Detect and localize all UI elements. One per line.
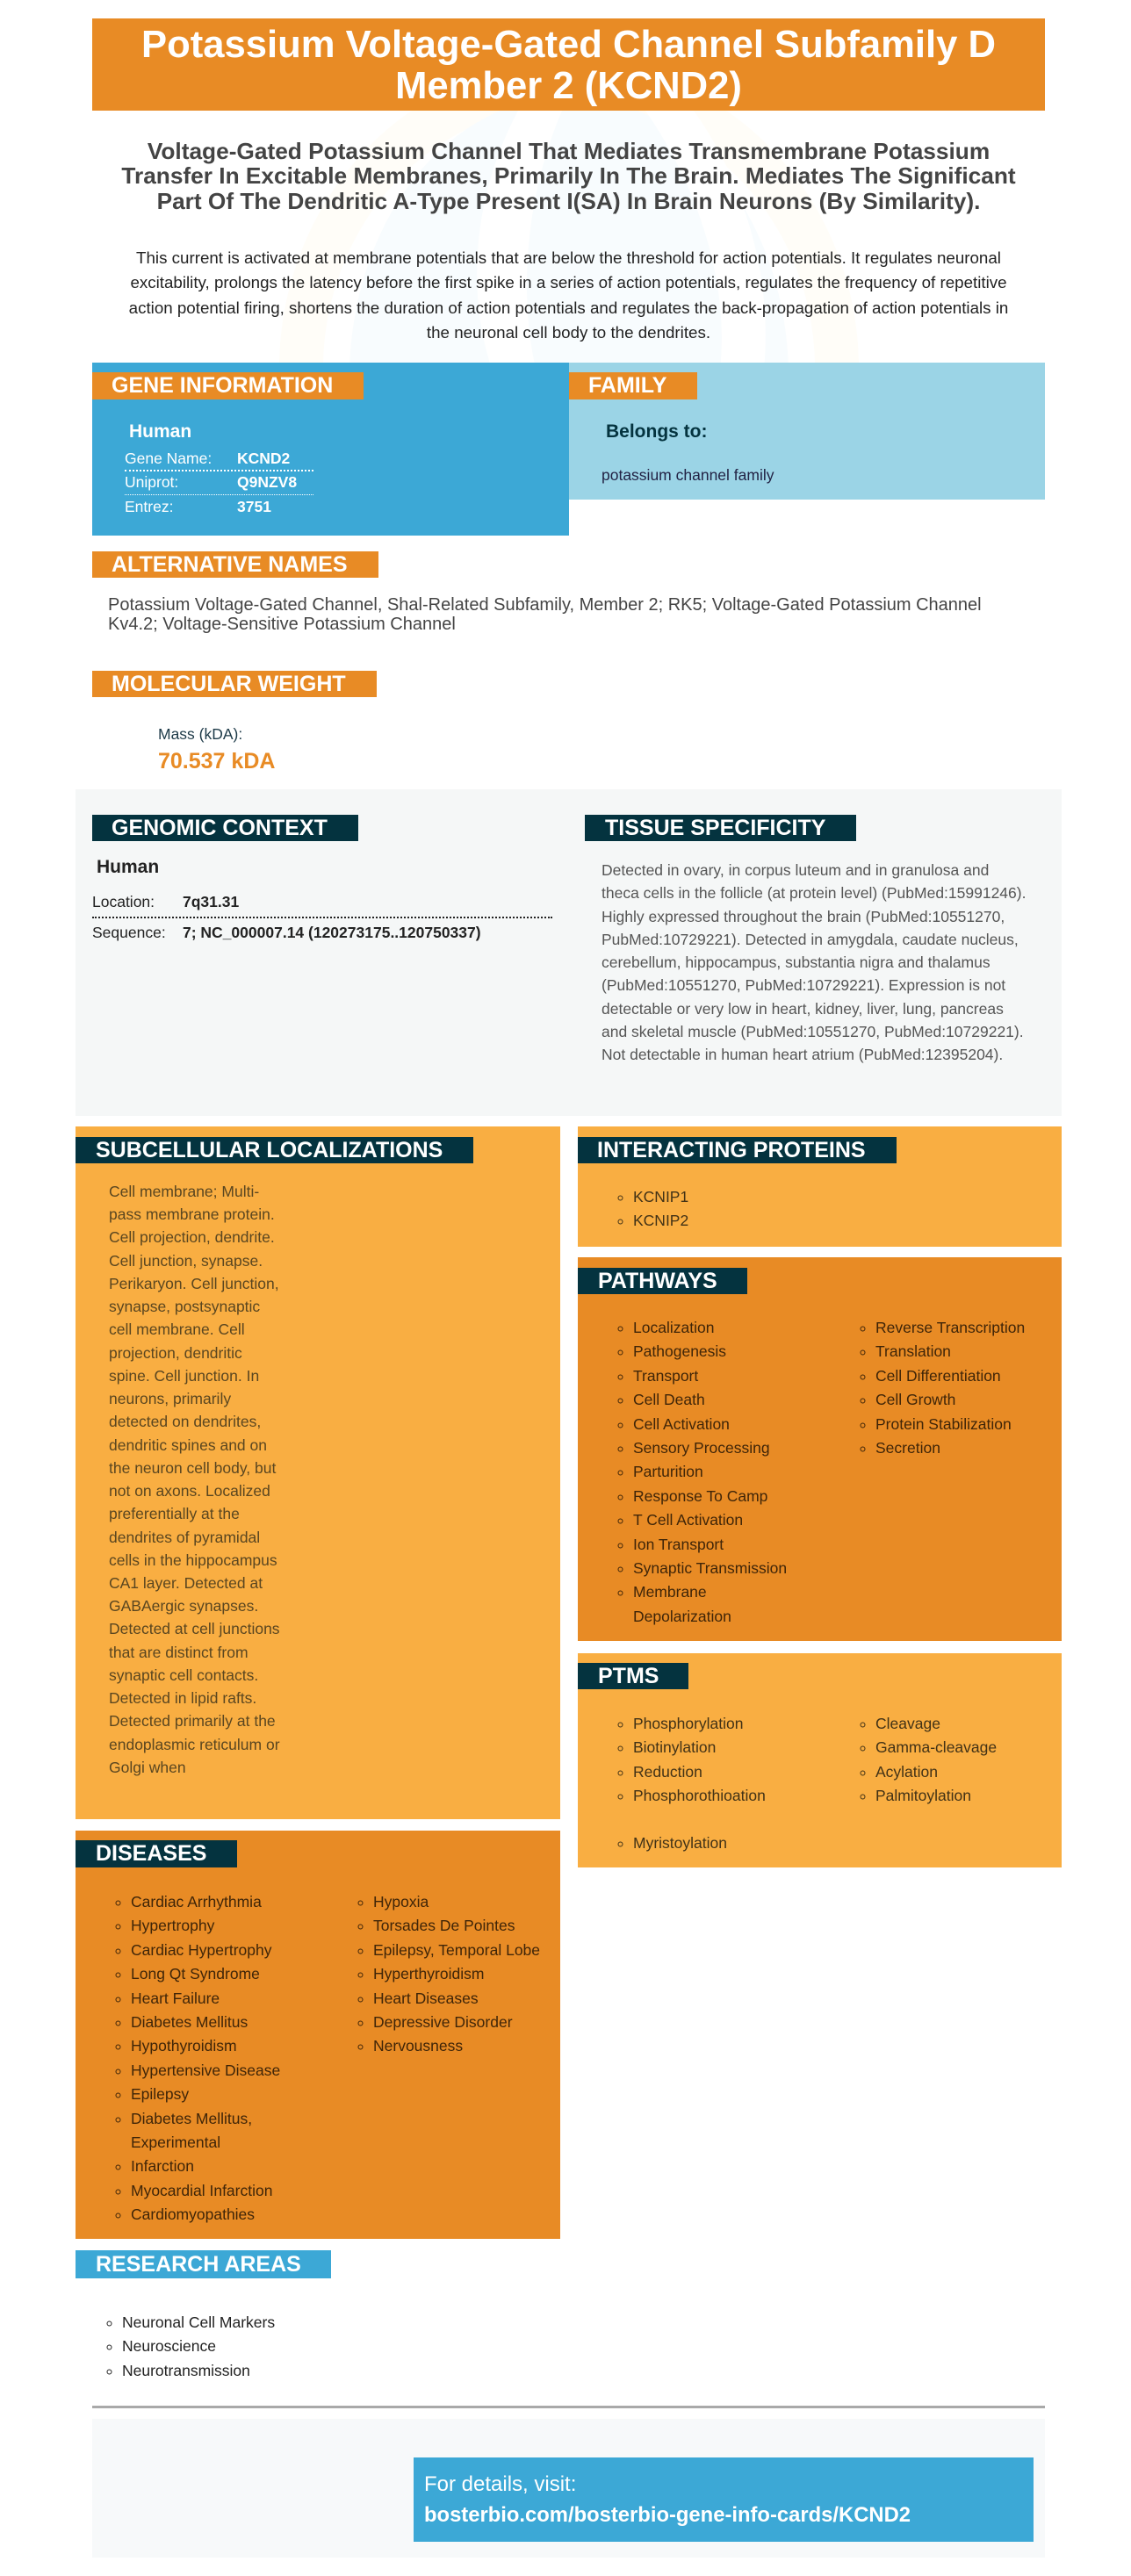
tissue specificity text: theca cells in the follicle (at protein level) (PubMed:15991246). — [602, 884, 1026, 902]
details label: For details, visit: — [424, 2472, 576, 2496]
pathways list column 1 — [618, 1319, 787, 1625]
gene details table: 3751 — [237, 498, 271, 515]
heading: family — [569, 372, 697, 399]
localization text — [109, 1183, 280, 1776]
PTM list column 1: Reduction — [633, 1763, 702, 1781]
localization text: Golgi when — [109, 1759, 186, 1776]
genomic location table: 7q31.31 — [183, 893, 239, 910]
heading: molecular weight: MOLECULAR WEIGHT — [112, 672, 346, 696]
background watermark logo — [0, 0, 1131, 369]
title banner: Member 2 (KCND2) — [395, 65, 742, 107]
pathways list column 1: Response To Camp — [633, 1487, 767, 1505]
pathways list column 1: Parturition — [633, 1463, 703, 1480]
localization text: the neuron cell body, but — [109, 1459, 276, 1477]
diseases list column 1 — [116, 1893, 280, 2223]
species label: Human — [97, 857, 159, 877]
gene details table: Q9NZV8 — [237, 473, 297, 491]
gene details table — [125, 450, 313, 515]
localization text: Perikaryon. Cell junction, — [109, 1275, 279, 1292]
heading: pathways — [578, 1268, 747, 1294]
heading: alternative names: ALTERNATIVE NAMES — [112, 552, 348, 577]
research areas list: Neurotransmission — [122, 2362, 250, 2379]
tissue specificity text: Detected in ovary, in corpus luteum and in granulosa and — [602, 861, 989, 879]
PTM list column 2: Gamma-cleavage — [875, 1738, 997, 1756]
PTM list column 1 — [618, 1715, 766, 1852]
belongs to label: Belongs to: — [606, 421, 708, 442]
pathways list column 2: Cell Differentiation — [875, 1367, 1001, 1385]
diseases list column 1: Hypertensive Disease — [131, 2062, 280, 2079]
localization text: spine. Cell junction. In — [109, 1367, 259, 1385]
diseases list column 1: Experimental — [131, 2133, 220, 2151]
diseases list column 2: Epilepsy, Temporal Lobe — [373, 1941, 540, 1959]
pathways list column 1: Synaptic Transmission — [633, 1559, 787, 1577]
title banner: Potassium Voltage-Gated Channel Subfamily D — [141, 24, 996, 66]
heading: gene information: GENE INFORMATION — [112, 373, 333, 398]
PTM list column 2: Cleavage — [875, 1715, 940, 1732]
PTM list column 1: Phosphorylation — [633, 1715, 743, 1732]
PTM list column 1: Phosphorothioation — [633, 1787, 766, 1804]
family name: potassium channel family — [602, 466, 774, 484]
heading: research areas: RESEARCH AREAS — [96, 2252, 301, 2277]
localization text: endoplasmic reticulum or — [109, 1736, 280, 1753]
panel: interacting proteins — [578, 1126, 1062, 1247]
localization text: cells in the hippocampus — [109, 1551, 277, 1569]
subtitle: Transfer In Excitable Membranes, Primarily In The Brain. Mediates The Significant — [121, 162, 1016, 189]
heading: diseases: DISEASES — [96, 1841, 206, 1866]
pathways list column 2: Secretion — [875, 1439, 940, 1457]
subtitle: Part Of The Dendritic A-Type Present I(SA) In Brain Neurons (By Similarity). — [157, 188, 980, 214]
pathways list column 1: Transport — [633, 1367, 698, 1385]
panel: subcellular localizations — [76, 1126, 560, 1819]
diseases list column 2: Torsades De Pointes — [373, 1917, 515, 1934]
panel: PTMs — [578, 1653, 1062, 1867]
localization text: that are distinct from — [109, 1644, 249, 1661]
heading: genomic context: GENOMIC CONTEXT — [112, 816, 328, 840]
pathways list column 1: Localization — [633, 1319, 714, 1336]
heading: family: FAMILY — [588, 373, 666, 398]
pathways list column 1: Cell Activation — [633, 1415, 730, 1433]
pathways list column 1: Sensory Processing — [633, 1439, 770, 1457]
diseases list column 1: Infarction — [131, 2157, 194, 2175]
footer panel — [92, 2419, 1045, 2558]
pathways list column 2: Cell Growth — [875, 1391, 955, 1408]
localization text: Detected primarily at the — [109, 1712, 276, 1730]
tissue specificity text: cerebellum, hippocampus, substantia nigra and thalamus — [602, 953, 991, 971]
localization text: CA1 layer. Detected at — [109, 1574, 263, 1592]
localization text: projection, dendritic — [109, 1344, 242, 1362]
localization text: neurons, primarily — [109, 1390, 231, 1407]
alternative names text: Kv4.2; Voltage-Sensitive Potassium Channel — [108, 615, 456, 634]
heading: subcellular localizations: SUBCELLULAR LOCALIZATIONS — [96, 1138, 443, 1162]
panel: pathways — [578, 1257, 1062, 1641]
alternative names text: Potassium Voltage-Gated Channel, Shal-Related Subfamily, Member 2; RK5; Voltage-Gated Potassium Channel — [108, 595, 982, 615]
diseases list column 1: Hypertrophy — [131, 1917, 214, 1934]
alternative names text — [108, 595, 982, 634]
localization text: Cell membrane; Multi- — [109, 1183, 259, 1200]
tissue specificity text — [602, 861, 1026, 1063]
description paragraph — [129, 248, 1008, 342]
diseases list column 1: Heart Failure — [131, 1990, 220, 2007]
genomic location table — [92, 893, 552, 941]
pathways list column 2: Protein Stabilization — [875, 1415, 1012, 1433]
species label: Human — [129, 421, 191, 442]
gene details table: Gene Name: — [125, 450, 212, 467]
diseases list column 2 — [358, 1893, 540, 2054]
description paragraph: the neuronal cell body to the dendrites. — [427, 323, 710, 342]
research areas list: Neuronal Cell Markers — [122, 2313, 275, 2331]
protein list: KCNIP2 — [633, 1212, 688, 1229]
diseases list column 1: Hypothyroidism — [131, 2037, 237, 2054]
PTM list column 1: Biotinylation — [633, 1738, 716, 1756]
localization text: GABAergic synapses. — [109, 1597, 258, 1615]
tissue specificity text: detectable or very low in heart, kidney, liver, lung, pancreas — [602, 999, 1004, 1017]
panel: family — [569, 363, 1045, 500]
tissue specificity text: and skeletal muscle (PubMed:10551270, PubMed:10729221). — [602, 1023, 1024, 1040]
pathways list column 1: Ion Transport — [633, 1536, 724, 1553]
description paragraph: excitability, prolongs the latency before the first spike in a series of action potentials, regulates the frequency of repetitive — [130, 273, 1007, 291]
pathways list column 1: Membrane — [633, 1583, 707, 1601]
research areas list — [107, 2313, 275, 2379]
localization text: synapse, postsynaptic — [109, 1298, 260, 1315]
panel: diseases — [76, 1831, 560, 2239]
localization text: Detected at cell junctions — [109, 1620, 280, 1637]
PTM list column 1: Myristoylation — [633, 1834, 727, 1852]
PTM list column 2 — [861, 1715, 997, 1804]
heading: tissue specificity: TISSUE SPECIFICITY — [605, 816, 825, 840]
panel: genomic context and tissue specificity — [76, 789, 1062, 1116]
localization text: preferentially at the — [109, 1505, 240, 1522]
molecular weight value: 70.537 kDA — [158, 749, 275, 774]
tissue specificity text: Highly expressed throughout the brain (PubMed:10551270, — [602, 908, 1005, 925]
genomic location table: 7; NC_000007.14 (120273175..120750337) — [183, 924, 481, 941]
localization text: synaptic cell contacts. — [109, 1666, 258, 1684]
localization text: dendritic spines and on — [109, 1436, 267, 1454]
localization text: dendrites of pyramidal — [109, 1529, 260, 1546]
pathways list column 1: Depolarization — [633, 1608, 731, 1625]
pathways list column 2: Reverse Transcription — [875, 1319, 1025, 1336]
diseases list column 1: Long Qt Syndrome — [131, 1965, 260, 1982]
protein list — [618, 1188, 688, 1229]
heading: pathways: PATHWAYS — [598, 1269, 717, 1293]
diseases list column 1: Cardiomyopathies — [131, 2205, 255, 2223]
diseases list column 1: Diabetes Mellitus — [131, 2013, 248, 2031]
pathways list column 2 — [861, 1319, 1025, 1457]
gene details table: Entrez: — [125, 498, 173, 515]
pathways list column 2: Translation — [875, 1342, 951, 1360]
call to action box — [414, 2457, 1034, 2542]
pathways list column 1: Cell Death — [633, 1391, 705, 1408]
localization text: pass membrane protein. — [109, 1205, 275, 1223]
research areas list: Neuroscience — [122, 2337, 216, 2355]
protein list: KCNIP1 — [633, 1188, 688, 1205]
heading: PTMs — [578, 1663, 688, 1689]
heading: PTMs: PTMS — [598, 1664, 659, 1688]
diseases list column 2: Depressive Disorder — [373, 2013, 513, 2031]
molecular weight value: Mass (kDA): — [158, 725, 242, 743]
diseases list column 2: Hyperthyroidism — [373, 1965, 484, 1982]
PTM list column 2: Palmitoylation — [875, 1787, 971, 1804]
subtitle: Voltage-Gated Potassium Channel That Mediates Transmembrane Potassium — [148, 138, 990, 164]
panel: gene information — [92, 363, 569, 536]
diseases list column 1: Myocardial Infarction — [131, 2182, 272, 2199]
heading: interacting proteins: INTERACTING PROTEINS — [597, 1138, 866, 1162]
localization text: cell membrane. Cell — [109, 1320, 245, 1338]
details url: bosterbio.com/bosterbio-gene-info-cards/KCND2 — [424, 2503, 911, 2527]
heading: diseases — [76, 1840, 237, 1867]
diseases list column 1: Cardiac Arrhythmia — [131, 1893, 262, 1910]
description paragraph: This current is activated at membrane potentials that are below the threshold for action potentials. It regulates neuronal — [136, 248, 1001, 267]
diseases list column 1: Cardiac Hypertrophy — [131, 1941, 271, 1959]
subtitle — [121, 138, 1016, 214]
genomic location table: Sequence: — [92, 924, 166, 941]
pathways list column 1: T Cell Activation — [633, 1511, 743, 1529]
diseases list column 1: Diabetes Mellitus, — [131, 2110, 252, 2127]
genomic location table: Location: — [92, 893, 155, 910]
tissue specificity text: PubMed:10729221). Detected in amygdala, caudate nucleus, — [602, 931, 1019, 948]
diseases list column 2: Heart Diseases — [373, 1990, 479, 2007]
gene details table: KCND2 — [237, 450, 290, 467]
tissue specificity text: (PubMed:10551270, PubMed:10729221). Expression is not — [602, 976, 1005, 994]
PTM list column 2: Acylation — [875, 1763, 938, 1781]
localization text: Cell projection, dendrite. — [109, 1228, 275, 1246]
gene details table: Uniprot: — [125, 473, 178, 491]
tissue specificity text: Not detectable in human heart atrium (PubMed:12395204). — [602, 1046, 1003, 1063]
diseases list column 2: Hypoxia — [373, 1893, 429, 1910]
molecular weight value — [158, 725, 275, 774]
localization text: not on axons. Localized — [109, 1482, 270, 1500]
localization text: detected on dendrites, — [109, 1413, 261, 1430]
title banner — [92, 18, 1045, 111]
localization text: Detected in lipid rafts. — [109, 1689, 256, 1707]
description paragraph: action potential firing, shortens the duration of action potentials and regulates the back-propagation of action potentials in — [129, 299, 1008, 317]
localization text: Cell junction, synapse. — [109, 1252, 263, 1270]
pathways list column 1: Pathogenesis — [633, 1342, 726, 1360]
diseases list column 2: Nervousness — [373, 2037, 463, 2054]
diseases list column 1: Epilepsy — [131, 2085, 189, 2103]
